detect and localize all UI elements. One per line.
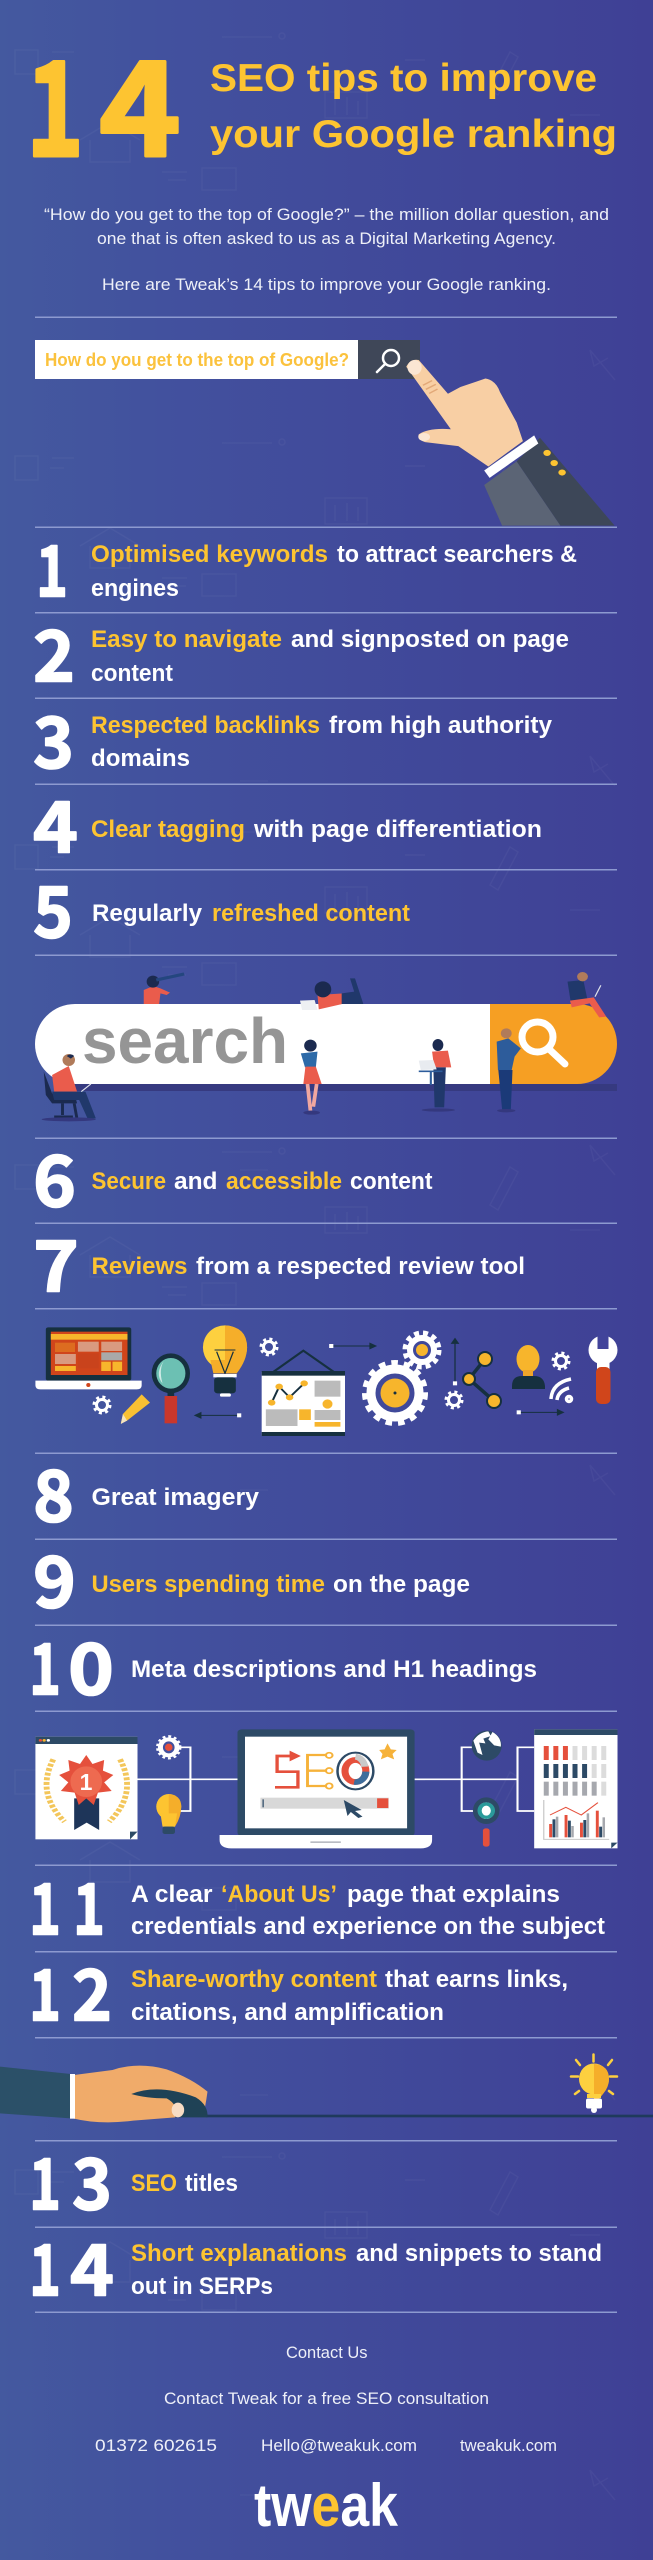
cursor <box>344 1800 363 1818</box>
tip 12 <box>29 1940 568 2042</box>
tip 3: Respected backlinks <box>91 712 320 739</box>
search box <box>35 340 420 379</box>
icon: gear <box>158 1736 180 1758</box>
tip 14 <box>29 2214 602 2316</box>
tip 8: Great imagery <box>92 1484 260 1511</box>
intro text <box>44 205 609 294</box>
tip 1: Optimised keywords <box>91 541 328 568</box>
icon: lightbulb <box>203 1325 247 1397</box>
tip 11: credentials and experience on the subject <box>131 1913 605 1940</box>
email: Hello@tweakuk.com <box>261 2436 417 2455</box>
icon: laptop <box>35 1327 142 1389</box>
intro text: one that is often asked to us as a Digital Marketing Agency. <box>97 229 556 248</box>
tip 2: and signposted on page <box>291 626 569 653</box>
tip 10 <box>29 1614 537 1716</box>
big number 14 <box>26 4 181 194</box>
title line 2: your Google ranking <box>210 113 617 156</box>
tip 2: Easy to navigate <box>91 626 282 653</box>
icon: wifi <box>551 1379 572 1402</box>
tip 9 <box>33 1526 470 1628</box>
tip 7: from a respected review tool <box>196 1253 525 1280</box>
title line 1: SEO tips to improve <box>210 57 597 100</box>
chart <box>544 1800 609 1839</box>
people <box>42 972 606 1121</box>
tip 6: accessible <box>226 1168 342 1195</box>
dividers <box>35 316 617 2313</box>
tip 7: Reviews <box>92 1253 188 1280</box>
SEO laptop diagram <box>35 1729 618 1848</box>
tip 5 <box>33 856 410 958</box>
icon: wrench <box>588 1330 618 1404</box>
icon: hand on mouse <box>0 2066 653 2122</box>
tip 8: 8 <box>33 1440 74 1542</box>
icon: glowing bulb <box>571 2054 617 2113</box>
icon: globe <box>472 1731 502 1761</box>
person with telescope <box>144 974 184 1004</box>
gears <box>94 1333 569 1423</box>
icon: person <box>512 1345 545 1389</box>
standing man with magnifier <box>497 1028 521 1112</box>
contact block <box>95 2343 557 2455</box>
tip 13: SEO <box>131 2170 177 2197</box>
tip 8 <box>33 1440 260 1542</box>
icon: magnifier <box>377 350 399 372</box>
tip 12: citations, and amplification <box>131 1999 444 2026</box>
tip 6: 6 <box>33 1126 76 1228</box>
tip 13: 1 <box>29 2128 61 2230</box>
tip 7 <box>33 1210 525 1312</box>
icon row: gears, share, person, wrench <box>94 1330 618 1423</box>
tip 3 <box>33 687 553 789</box>
tip 5: 5 <box>33 856 73 958</box>
tip 6: Secure <box>92 1168 166 1195</box>
tip 4: Clear tagging <box>91 816 245 843</box>
tip 6: and <box>174 1168 218 1195</box>
tip 1: 1 <box>36 516 68 618</box>
icon: lightbulb <box>156 1794 181 1834</box>
logo: tweak: tweak <box>254 2472 399 2539</box>
intro text: Here are Tweak’s 14 tips to improve your Google ranking. <box>102 275 551 294</box>
O gear <box>338 1753 373 1789</box>
tip 14: 4 <box>70 2214 114 2316</box>
tip 4 <box>33 772 542 874</box>
tip 12: 1 <box>29 1940 61 2042</box>
tip 7: 7 <box>33 1210 79 1312</box>
tip 10: Meta descriptions and H1 headings <box>131 1656 537 1683</box>
orange button <box>490 1004 617 1084</box>
person lying on bar <box>300 978 363 1010</box>
tip 3: from high authority <box>329 712 553 739</box>
tip 4: 4 <box>33 772 78 874</box>
tip 2 <box>33 600 569 702</box>
title <box>26 4 617 194</box>
tip 2: 2 <box>33 600 75 702</box>
tip 12: 2 <box>72 1940 112 2042</box>
connector lines <box>138 1747 534 1811</box>
standing woman with tablet <box>301 1040 322 1115</box>
tip 10: 1 <box>29 1614 61 1716</box>
S letter <box>275 1756 298 1787</box>
icon: magnifying glass <box>152 1353 190 1423</box>
intro text: “How do you get to the top of Google?” – the million dollar question, and <box>44 205 609 224</box>
tip 10: 0 <box>68 1614 114 1716</box>
tip 9: Users spending time <box>92 1571 325 1598</box>
rank number on award: 1 <box>80 1769 93 1795</box>
tip 9: on the page <box>333 1571 470 1598</box>
people rows <box>544 1746 568 1760</box>
tip 3: domains <box>91 745 190 772</box>
icon: pencil <box>121 1394 150 1424</box>
tip 13: titles <box>185 2170 238 2197</box>
search field <box>260 1798 389 1809</box>
tip 5: refreshed content <box>212 900 410 927</box>
tip 12: that earns links, <box>385 1966 568 1993</box>
standing woman at table <box>419 1039 455 1112</box>
award document <box>35 1737 138 1839</box>
E letter <box>308 1755 327 1786</box>
tip 14: 1 <box>29 2214 61 2316</box>
tip 14: out in SERPs <box>131 2273 273 2300</box>
laptop <box>220 1729 432 1848</box>
search word: search <box>82 1005 288 1077</box>
icon: chart board <box>262 1351 345 1436</box>
tip 9: 9 <box>33 1526 76 1628</box>
icon row: SEO tools <box>35 1325 563 1436</box>
big number 14: 4 <box>99 4 181 194</box>
tip 11 <box>29 1854 605 1956</box>
icon: pointing hand <box>406 360 615 526</box>
icon: big magnifier <box>522 1022 565 1064</box>
tip 6 <box>33 1126 432 1228</box>
tip 14: and snippets to stand <box>356 2240 602 2267</box>
tip 4: with page differentiation <box>253 816 542 843</box>
tip 5: Regularly <box>92 900 203 927</box>
contact tagline: Contact Tweak for a free SEO consultation <box>164 2389 489 2408</box>
website: tweakuk.com <box>460 2436 557 2455</box>
icon: magnifier <box>473 1797 500 1847</box>
contact heading: Contact Us <box>286 2343 368 2362</box>
bar shadow <box>70 1084 617 1091</box>
tip 1: to attract searchers & <box>337 541 577 568</box>
big number 14: 1 <box>26 4 84 194</box>
tip 11: A clear <box>131 1881 212 1908</box>
tip 14: Short explanations <box>131 2240 347 2267</box>
tip 6: content <box>350 1168 432 1195</box>
tip 12: Share-worthy content <box>131 1966 377 1993</box>
statistics document <box>534 1729 618 1848</box>
icon: share nodes <box>463 1352 501 1408</box>
tip 2: content <box>91 660 173 687</box>
tip 1: engines <box>91 575 179 602</box>
tip 13: 3 <box>72 2128 112 2230</box>
tip 11: ‘About Us’ <box>221 1881 337 1908</box>
tip 13 <box>29 2128 238 2230</box>
star <box>379 1743 397 1759</box>
tip 11: 1 <box>73 1854 105 1956</box>
tip 11: page that explains <box>347 1881 560 1908</box>
tip 11: 1 <box>29 1854 61 1956</box>
search query text: How do you get to the top of Google? <box>45 350 349 370</box>
phone: 01372 602615 <box>95 2436 217 2455</box>
person in chair <box>42 1054 96 1121</box>
person sitting on button <box>568 972 606 1017</box>
tip 3: 3 <box>33 687 74 789</box>
search bar illustration <box>35 972 617 1121</box>
tip 1 <box>36 516 577 618</box>
arrows <box>195 1339 563 1418</box>
white search pill <box>35 1004 490 1084</box>
